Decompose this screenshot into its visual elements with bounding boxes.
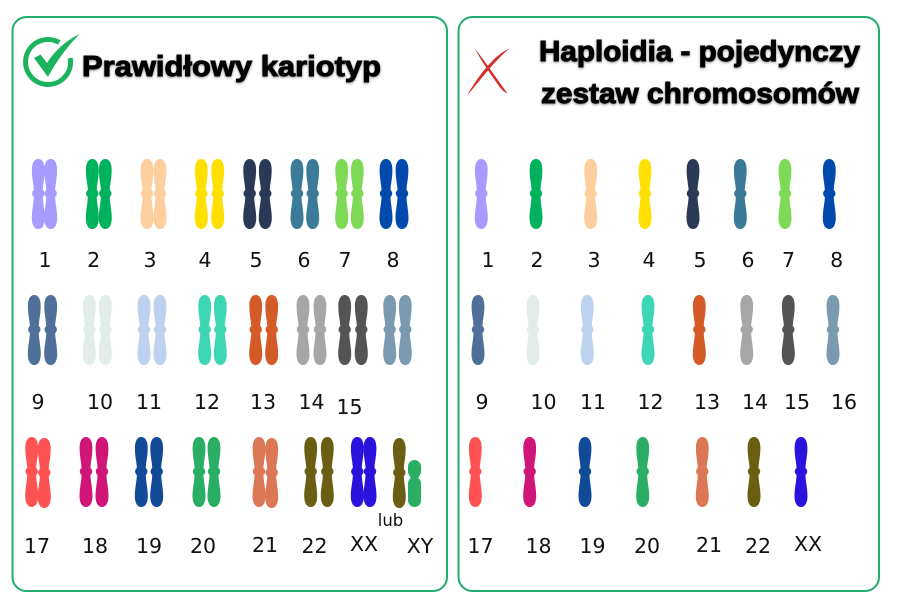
labels row 3: 17 — [467, 534, 494, 558]
labels row 1: 4 — [642, 248, 656, 272]
labels row 2: 13 — [694, 390, 720, 414]
labels row 3: 22 — [301, 534, 328, 558]
labels row 3: XX — [794, 532, 822, 556]
labels row 2: 12 — [637, 390, 664, 414]
heading: haploidy: zestaw chromosomów — [541, 78, 859, 110]
labels row 2: 12 — [194, 390, 220, 414]
labels row 3: 18 — [525, 534, 552, 558]
labels row 1: 7 — [782, 248, 795, 272]
heading: haploidy: Haploidia - pojedynczy — [539, 36, 860, 68]
labels row 2: 14 — [742, 390, 768, 414]
labels row 2: 9 — [475, 390, 489, 414]
labels row 3: 20 — [634, 534, 660, 558]
labels row 3: 21 — [696, 533, 722, 557]
chromosome row 3 — [25, 437, 421, 508]
labels row 3 — [467, 532, 822, 558]
label: lub: lub — [378, 511, 403, 530]
labels row 3: XX — [350, 532, 378, 556]
labels row 1: 6 — [297, 248, 311, 272]
labels row 2: 9 — [31, 390, 45, 414]
labels row 2: 11 — [580, 390, 606, 414]
chromosome row 1 — [32, 159, 409, 229]
labels row 3: 20 — [190, 534, 216, 558]
labels row 1: 7 — [338, 248, 352, 272]
labels row 1: 1 — [38, 248, 52, 272]
labels row 2: 10 — [530, 390, 557, 414]
labels row 1: 5 — [249, 248, 263, 272]
labels row 3: 18 — [82, 534, 108, 558]
chromosome row 2 — [472, 295, 840, 365]
chromosome row 1 — [475, 159, 836, 229]
labels row 2: 13 — [250, 390, 276, 414]
labels row 2: 14 — [298, 390, 325, 414]
labels row 3: 22 — [745, 534, 771, 558]
labels row 1 — [481, 248, 843, 272]
labels row 2: 15 — [336, 395, 363, 419]
labels row 2 — [475, 390, 857, 414]
labels row 1: 8 — [386, 248, 400, 272]
icon: green check mark — [26, 34, 80, 84]
labels row 2 — [31, 390, 363, 419]
labels row 3 — [24, 532, 434, 558]
labels row 1: 3 — [587, 248, 601, 272]
panel border: right — [458, 17, 879, 591]
labels row 1: 3 — [143, 248, 157, 272]
labels row 2: 16 — [831, 390, 857, 414]
panel: haploidy — [458, 17, 879, 591]
labels row 2: 11 — [136, 390, 162, 414]
labels row 1: 8 — [830, 248, 843, 272]
labels row 3: XY — [407, 534, 434, 558]
labels row 3: 17 — [24, 534, 50, 558]
heading: normal karyotype: Prawidłowy kariotyp — [82, 51, 381, 83]
panel: normal karyotype — [12, 17, 447, 591]
labels row 1: 1 — [481, 248, 495, 272]
labels row 2: 10 — [87, 390, 113, 414]
chromosome Y — [408, 460, 421, 507]
labels row 3: 19 — [579, 534, 606, 558]
labels row 1: 2 — [530, 248, 544, 272]
heading: haploidy — [539, 36, 860, 110]
icon: red cross — [467, 48, 510, 96]
labels row 1: 5 — [693, 248, 707, 272]
labels row 3: 21 — [252, 533, 278, 557]
labels row 1: 2 — [87, 248, 100, 272]
labels row 1: 6 — [741, 248, 755, 272]
chromosome row 2 — [28, 295, 412, 365]
labels row 3: 19 — [136, 534, 162, 558]
chromosome row 3 — [469, 437, 808, 507]
labels row 2: 15 — [784, 390, 810, 414]
labels row 1 — [38, 248, 400, 272]
panel border: left — [12, 17, 447, 591]
labels row 1: 4 — [198, 248, 212, 272]
